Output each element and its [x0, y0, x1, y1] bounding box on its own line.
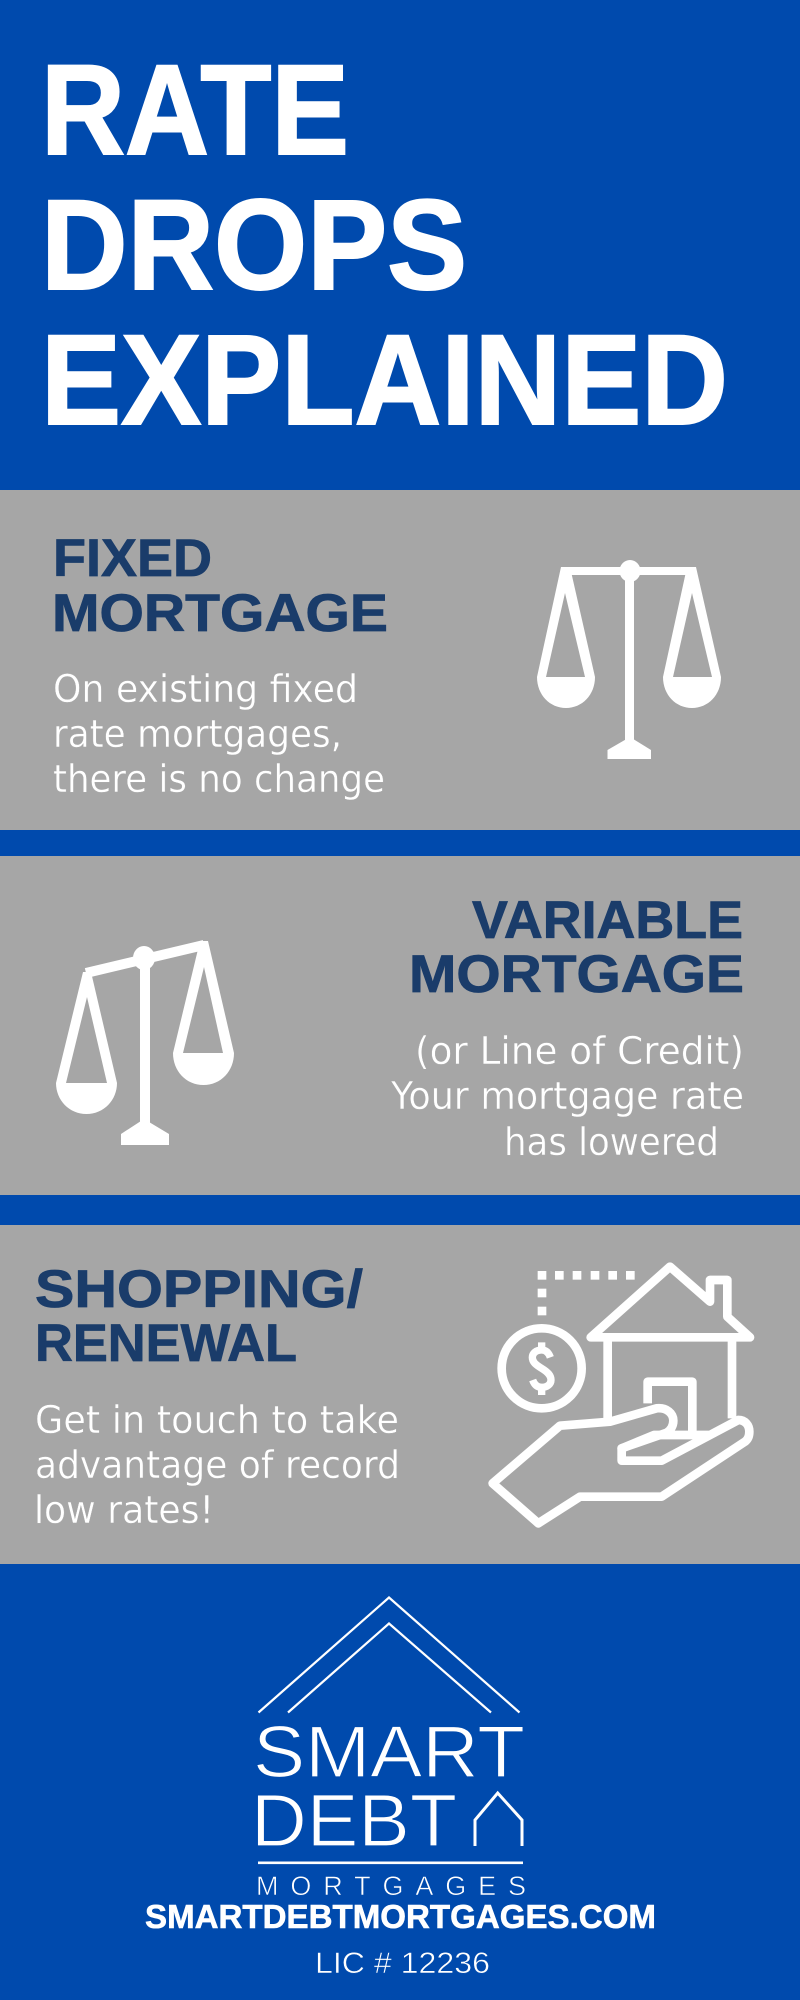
logo wordmark: MORTGAGES	[256, 1871, 526, 1901]
heading: variable mortgage: VARIABLE	[472, 891, 743, 950]
text: fixed mortgage description: rate mortgages,	[53, 712, 342, 756]
text: fixed mortgage description: On existing fixed	[53, 667, 358, 711]
heading: fixed mortgage: FIXED	[53, 529, 212, 588]
text: variable mortgage description	[390, 1029, 744, 1164]
text: shopping renewal description: low rates!	[34, 1488, 214, 1532]
panel: shopping renewal	[0, 1225, 800, 1564]
heading: fixed mortgage	[52, 529, 388, 643]
panel: fixed mortgage	[0, 490, 800, 830]
text: shopping renewal description	[34, 1398, 400, 1532]
panel: variable mortgage	[0, 856, 800, 1195]
text: shopping renewal description: Get in touch to take	[35, 1398, 399, 1442]
logo wordmark: DEBT	[251, 1779, 457, 1862]
title: DROPS	[41, 174, 467, 317]
logo wordmark	[251, 1712, 526, 1901]
heading: shopping renewal: SHOPPING/	[35, 1260, 363, 1319]
heading: variable mortgage	[409, 891, 744, 1004]
heading: shopping renewal	[35, 1260, 363, 1373]
title: RATE	[41, 39, 349, 182]
icon: balanced scales	[537, 560, 721, 759]
text: fixed mortgage description: there is no change	[53, 757, 385, 801]
website url: SMARTDEBTMORTGAGES.COM	[145, 1898, 656, 1935]
heading: variable mortgage: MORTGAGE	[409, 945, 744, 1004]
text: variable mortgage description: (or Line of Credit)	[415, 1029, 744, 1073]
logo: smart debt mortgages	[251, 1598, 526, 1901]
heading: fixed mortgage: MORTGAGE	[52, 584, 388, 643]
text: variable mortgage description: has lowered	[504, 1120, 719, 1164]
heading: shopping renewal: RENEWAL	[35, 1314, 297, 1373]
logo wordmark: SMART	[253, 1712, 525, 1793]
licence number: LIC # 12236	[315, 1947, 490, 1980]
icon: hand holding house with dollar coin	[493, 1267, 750, 1523]
title: EXPLAINED	[41, 309, 728, 452]
text: variable mortgage description: Your mortgage rate	[390, 1074, 744, 1118]
icon: tilted scales	[56, 941, 234, 1145]
text: fixed mortgage description	[53, 667, 385, 801]
text: shopping renewal description: advantage of record	[35, 1443, 400, 1487]
logo roof	[258, 1598, 520, 1712]
title	[41, 39, 728, 452]
